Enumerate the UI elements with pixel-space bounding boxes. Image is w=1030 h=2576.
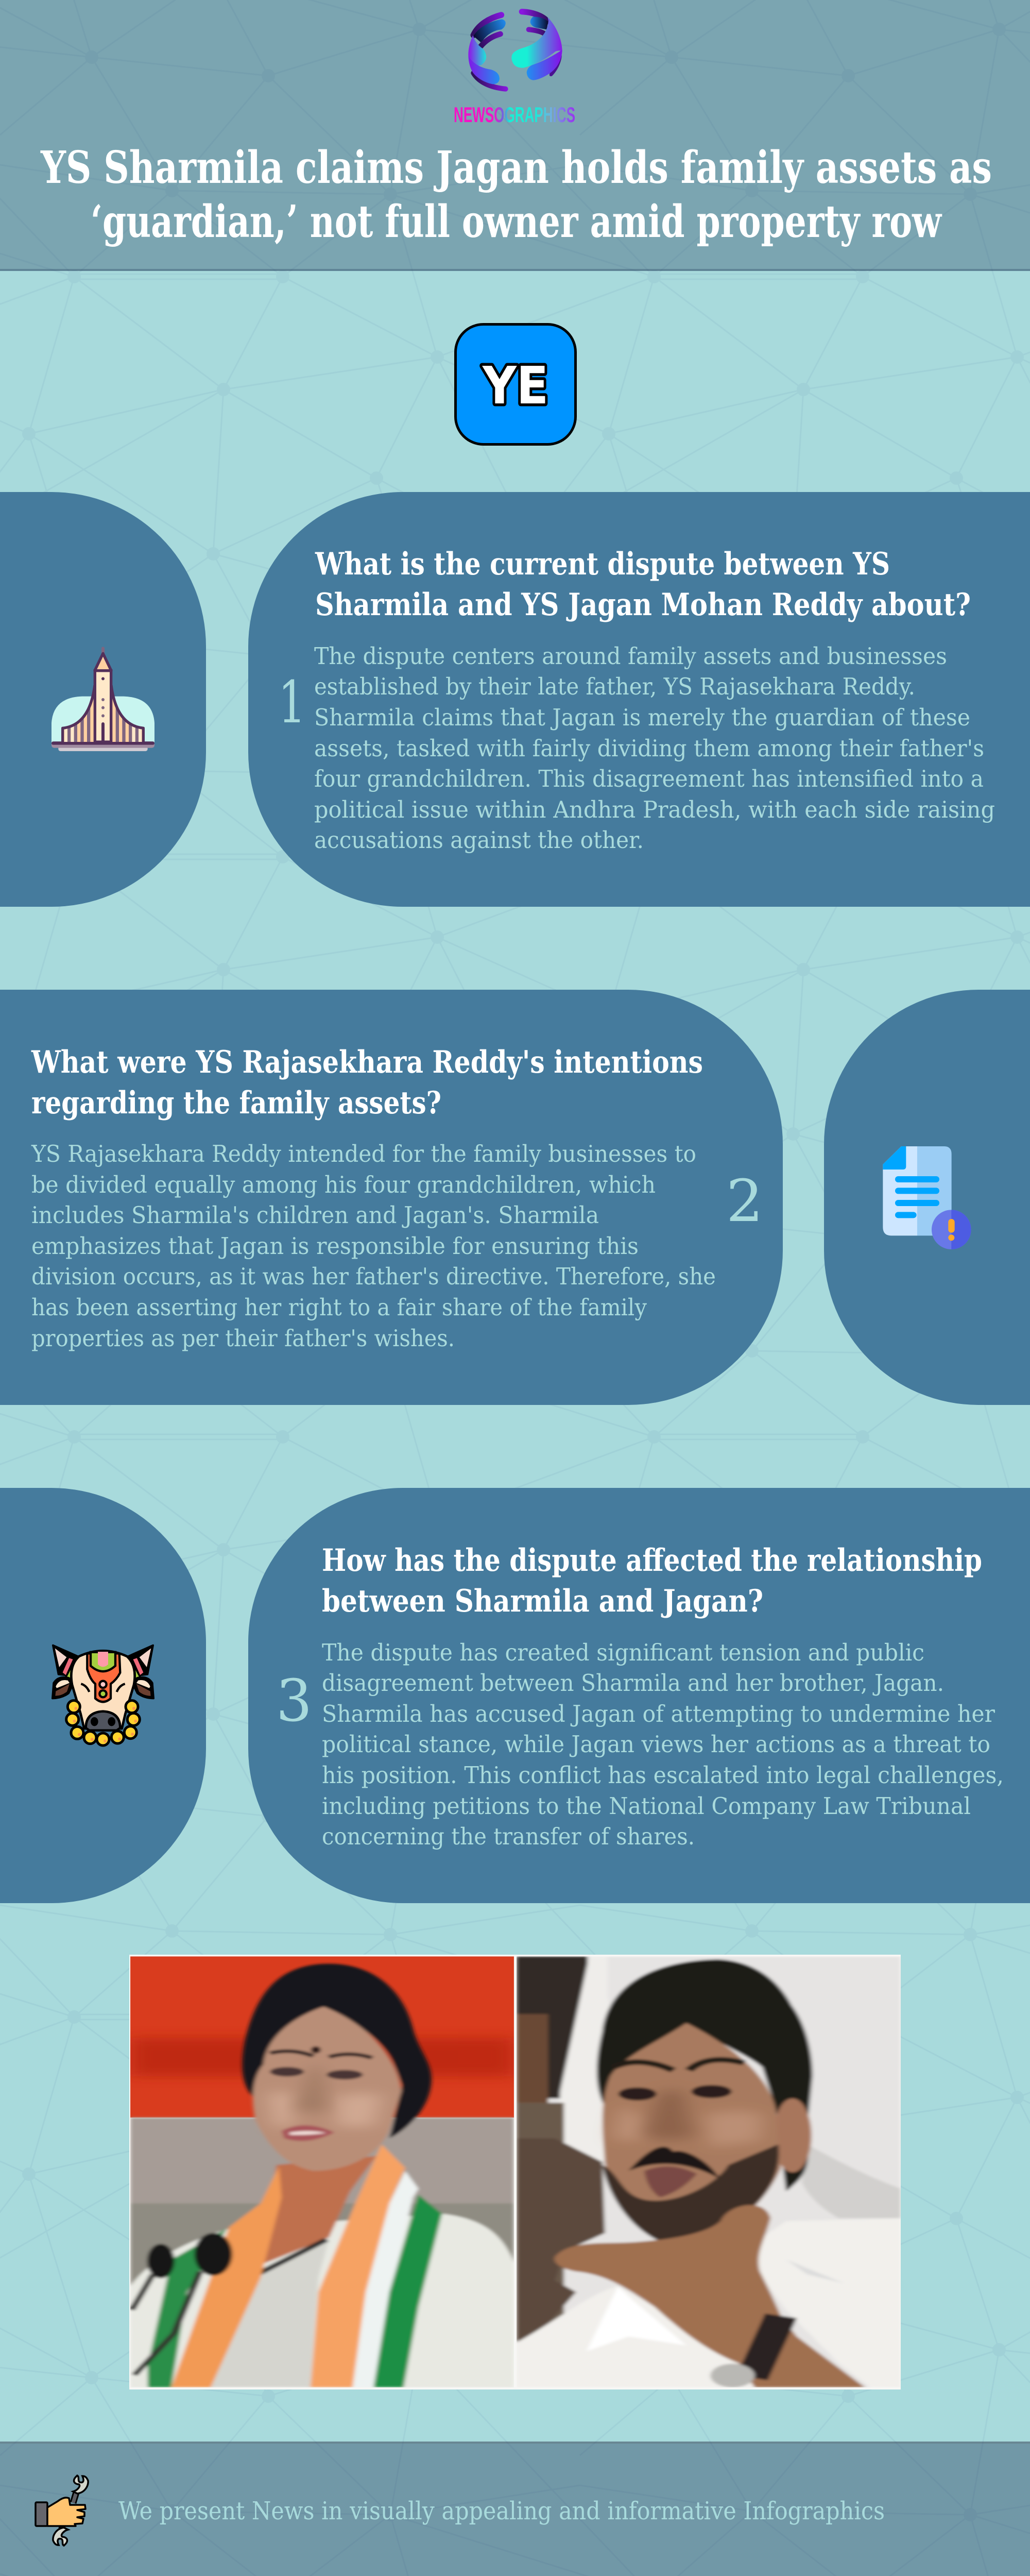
body text 3: his position. This conflict has escalated into legal challenges,: [322, 1761, 1004, 1789]
icon: YE badge: [455, 325, 576, 444]
body text 3: The dispute has created significant tension and public: [322, 1639, 924, 1666]
heading 3: [322, 1543, 982, 1619]
body text 2: be divided equally among his four grandchildren, which: [31, 1171, 656, 1198]
body text 1: accusations against the other.: [314, 826, 644, 854]
body text 1: The dispute centers around family assets and businesses: [314, 642, 947, 670]
icon: church tower: [52, 648, 154, 751]
tagline text: We present News in visually appealing and informative Infographics: [118, 2497, 885, 2526]
body text 1: four grandchildren. This disagreement has intensified into a: [314, 765, 984, 792]
body text 3: concerning the transfer of shares.: [322, 1823, 695, 1850]
body text 1: established by their late father, YS Rajasekhara Reddy.: [314, 673, 915, 700]
photo: Jagan gesturing: [517, 1956, 901, 2387]
photo: Sharmila speaking: [130, 1956, 514, 2387]
heading 2: [31, 1044, 703, 1121]
body text 1: Sharmila claims that Jagan is merely the guardian of these: [314, 704, 970, 731]
heading 1: What is the current dispute between YS: [315, 546, 890, 582]
panel: question 1: [248, 492, 1030, 907]
body text 2: includes Sharmila's children and Jagan's. Sharmila: [31, 1201, 599, 1229]
icon: YE badge: YE: [482, 355, 548, 416]
panel: question 3: [248, 1488, 1030, 1903]
body text 3: disagreement between Sharmila and her brother, Jagan.: [322, 1669, 944, 1697]
body text 3: political stance, while Jagan views her actions as a threat to: [322, 1731, 990, 1758]
title: [40, 142, 992, 248]
body text 2: has been asserting her right to a fair share of the family: [31, 1294, 647, 1321]
heading 1: [315, 546, 971, 623]
icon: document with alert: [883, 1146, 971, 1249]
photo: Sharmila and Jagan composite: [129, 1955, 901, 2389]
body text 3: [322, 1639, 1004, 1850]
header logo: [454, 12, 575, 127]
icon: hand holding wrench: [36, 2476, 88, 2546]
heading 2: What were YS Rajasekhara Reddy's intentions: [31, 1044, 703, 1080]
number 3: 3: [276, 1668, 312, 1735]
body text 1: assets, tasked with fairly dividing them among their father's: [314, 735, 984, 762]
panel: icon side 3: [0, 1488, 206, 1903]
body text 2: [31, 1140, 716, 1352]
heading 2: regarding the family assets?: [31, 1085, 441, 1121]
panel: icon side 2: [824, 990, 1030, 1405]
panel: icon side 1: [0, 492, 206, 907]
panel: question 2: [0, 990, 783, 1405]
body text 1: political issue within Andhra Pradesh, with each side raising: [314, 796, 995, 823]
body text 3: including petitions to the National Company Law Tribunal: [322, 1792, 971, 1820]
body text 2: division occurs, as it was her father's directive. Therefore, she: [31, 1263, 716, 1290]
body text 1: [314, 642, 995, 854]
body text 3: Sharmila has accused Jagan of attempting to undermine her: [322, 1700, 995, 1727]
icon: decorated bull: [53, 1645, 153, 1745]
header logo: NEWSOGRAPHICS: [454, 103, 575, 127]
number 1: 1: [278, 669, 306, 736]
band: tagline: [0, 2442, 1030, 2576]
body text 2: properties as per their father's wishes.: [31, 1325, 455, 1352]
body text 2: YS Rajasekhara Reddy intended for the family businesses to: [31, 1140, 696, 1167]
body text 2: emphasizes that Jagan is responsible for ensuring this: [31, 1232, 639, 1260]
number 2: 2: [726, 1168, 763, 1235]
heading 3: between Sharmila and Jagan?: [322, 1583, 763, 1619]
header band: [0, 0, 1030, 271]
